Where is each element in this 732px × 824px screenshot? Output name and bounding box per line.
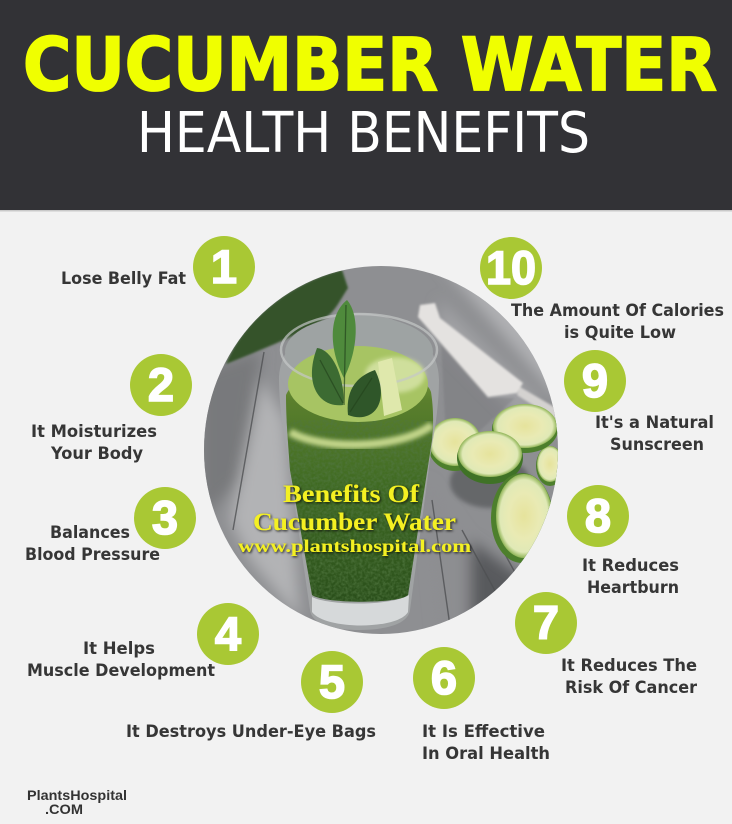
knife [418,303,556,440]
benefit 4: It Helps [83,639,155,659]
benefit 1: Lose Belly Fat [61,269,186,289]
benefit 7: Risk Of Cancer [565,678,698,698]
benefit 8: Heartburn [587,578,679,598]
photo caption: Benefits Of [283,481,420,508]
benefit 3 [25,487,196,565]
benefit 2 [31,354,192,464]
benefit 6 [413,647,550,764]
benefit 4: 4 [215,607,241,660]
subtitle: HEALTH BENEFITS [137,101,590,166]
benefit 7: 7 [533,596,559,649]
glass [279,313,440,630]
benefit 5: 5 [319,655,345,708]
benefit 7: It Reduces The [561,656,697,676]
benefit 10: is Quite Low [564,323,676,343]
benefit 10: The Amount Of Calories [511,301,724,321]
photo caption: www.plantshospital.com [238,536,471,556]
benefit 3: Blood Pressure [25,545,160,565]
benefit 10 [480,237,724,343]
photo caption: Cucumber Water [253,509,456,536]
header rule [0,210,732,212]
benefit 7 [515,592,698,698]
benefit 2: It Moisturizes [31,422,157,442]
cucumber stick [378,358,402,416]
benefit 6: 6 [431,651,457,704]
benefit 9: 9 [582,354,608,407]
benefit 3: Balances [50,523,130,543]
photo caption [238,481,471,556]
benefit 5 [126,651,376,742]
benefit 1: 1 [211,240,237,293]
wooden table [200,262,562,650]
whole cucumber [226,270,348,364]
benefit 2: Your Body [50,444,143,464]
cucumber slices [428,404,564,563]
benefit 9: Sunscreen [610,435,704,455]
benefit 4 [27,603,259,681]
mint leaves [312,300,381,417]
header band [0,0,732,210]
site credit: PlantsHospital [27,787,127,803]
central photo: glass of cucumber water [200,262,564,650]
benefit 6: In Oral Health [422,744,550,764]
benefit 8 [567,485,679,598]
benefit 9: It's a Natural [595,413,714,433]
benefit 6: It Is Effective [422,722,545,742]
benefit 8: 8 [585,489,611,542]
benefit 5: It Destroys Under-Eye Bags [126,722,376,742]
benefit 9 [564,350,714,455]
site credit [27,787,127,817]
benefit 3: 3 [152,491,178,544]
benefit 1 [61,236,255,298]
benefit 8: It Reduces [582,556,679,576]
site credit: .COM [45,801,83,817]
benefit 2: 2 [148,358,174,411]
benefit 10: 10 [486,241,536,294]
benefit 4: Muscle Development [27,661,215,681]
